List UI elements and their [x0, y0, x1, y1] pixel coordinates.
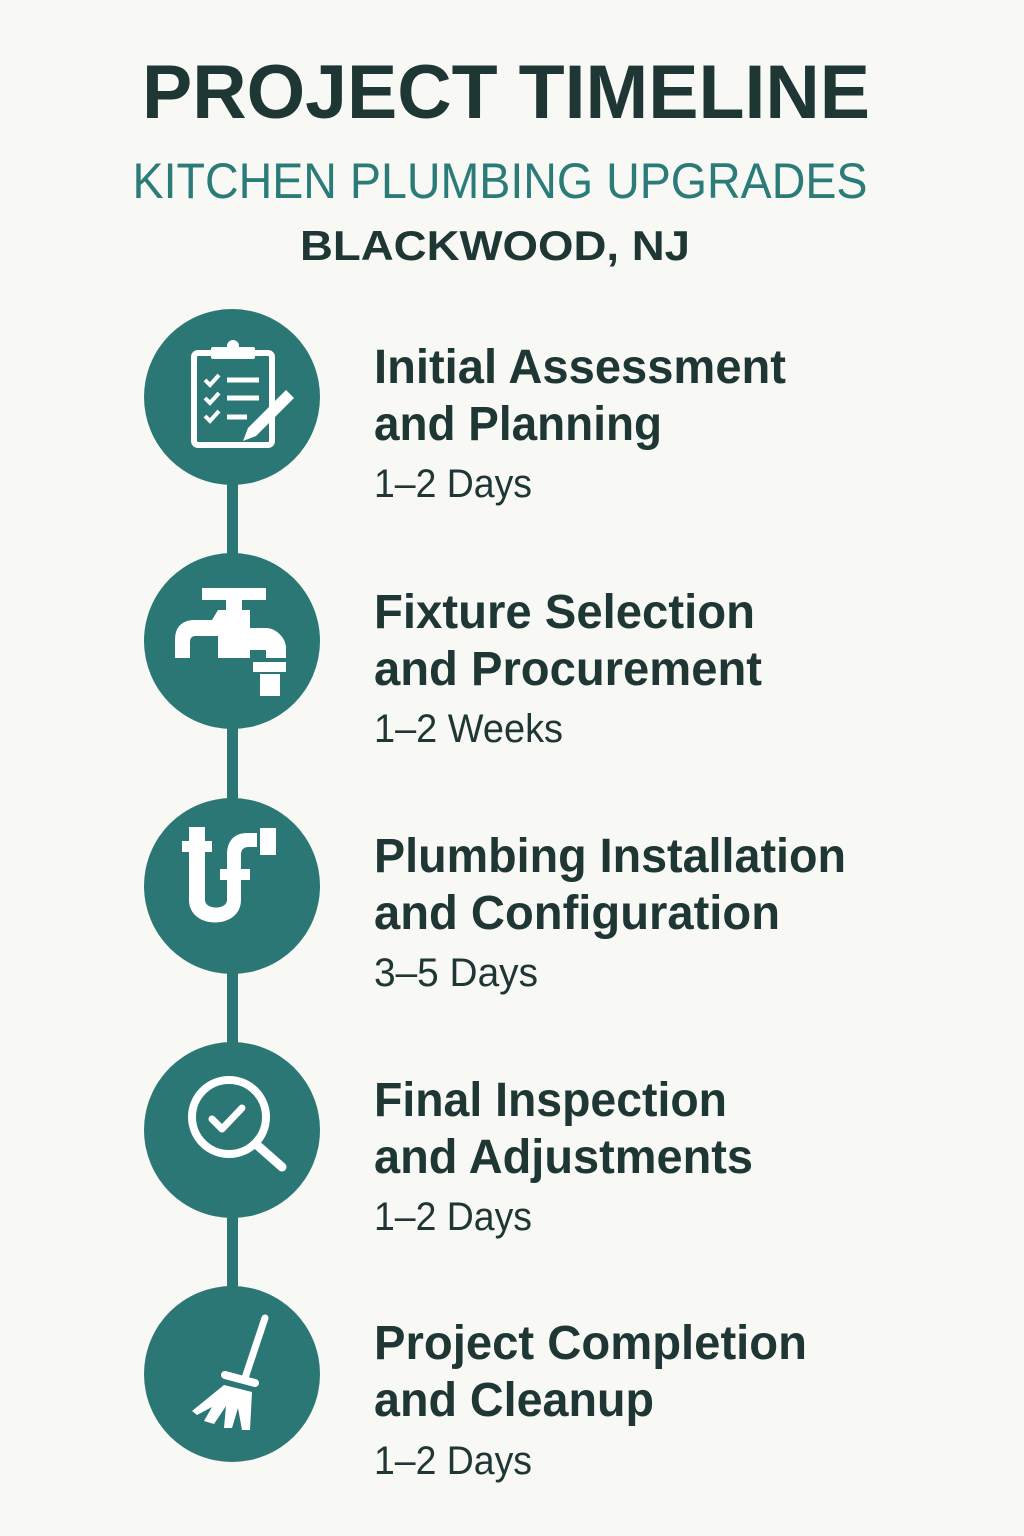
- icon: magnifier check: [144, 1042, 320, 1218]
- subtitle: KITCHEN PLUMBING UPGRADES: [132, 153, 868, 209]
- text: step 4: Final Inspection: [374, 1074, 727, 1127]
- icon: faucet: [144, 553, 320, 729]
- text: step 1: and Planning: [374, 398, 662, 451]
- connector line: [227, 397, 238, 1374]
- text: step 5: [374, 1317, 807, 1483]
- icon: broom: [144, 1286, 320, 1462]
- icon: pipe: [144, 798, 320, 974]
- text: step 4: [374, 1074, 753, 1239]
- text: step 4: and Adjustments: [374, 1131, 753, 1184]
- text: step 1: [374, 341, 786, 506]
- text: step 2: [374, 586, 762, 751]
- step 4: inspection: [144, 1042, 753, 1239]
- text: step 3: and Configuration: [374, 887, 780, 940]
- step 1: assessment: [144, 309, 786, 506]
- title: PROJECT TIMELINE: [142, 50, 870, 135]
- text: step 5: Project Completion: [374, 1317, 807, 1370]
- text: step 2: Fixture Selection: [374, 586, 755, 639]
- text: step 2: and Procurement: [374, 643, 762, 696]
- text: step 4: 1–2 Days: [374, 1195, 532, 1239]
- text: step 1: Initial Assessment: [374, 341, 786, 394]
- text: step 1: 1–2 Days: [374, 462, 532, 506]
- step 2: fixtures: [144, 553, 762, 751]
- text: step 3: Plumbing Installation: [374, 830, 846, 883]
- icon: clipboard: [144, 309, 320, 485]
- text: step 3: [374, 830, 846, 995]
- text: step 2: 1–2 Weeks: [374, 707, 563, 751]
- location: BLACKWOOD, NJ: [300, 222, 690, 269]
- text: step 5: 1–2 Days: [374, 1439, 532, 1483]
- text: step 3: 3–5 Days: [374, 951, 538, 995]
- step 3: installation: [144, 798, 846, 995]
- text: step 5: and Cleanup: [374, 1374, 654, 1427]
- step 5: completion: [144, 1286, 807, 1483]
